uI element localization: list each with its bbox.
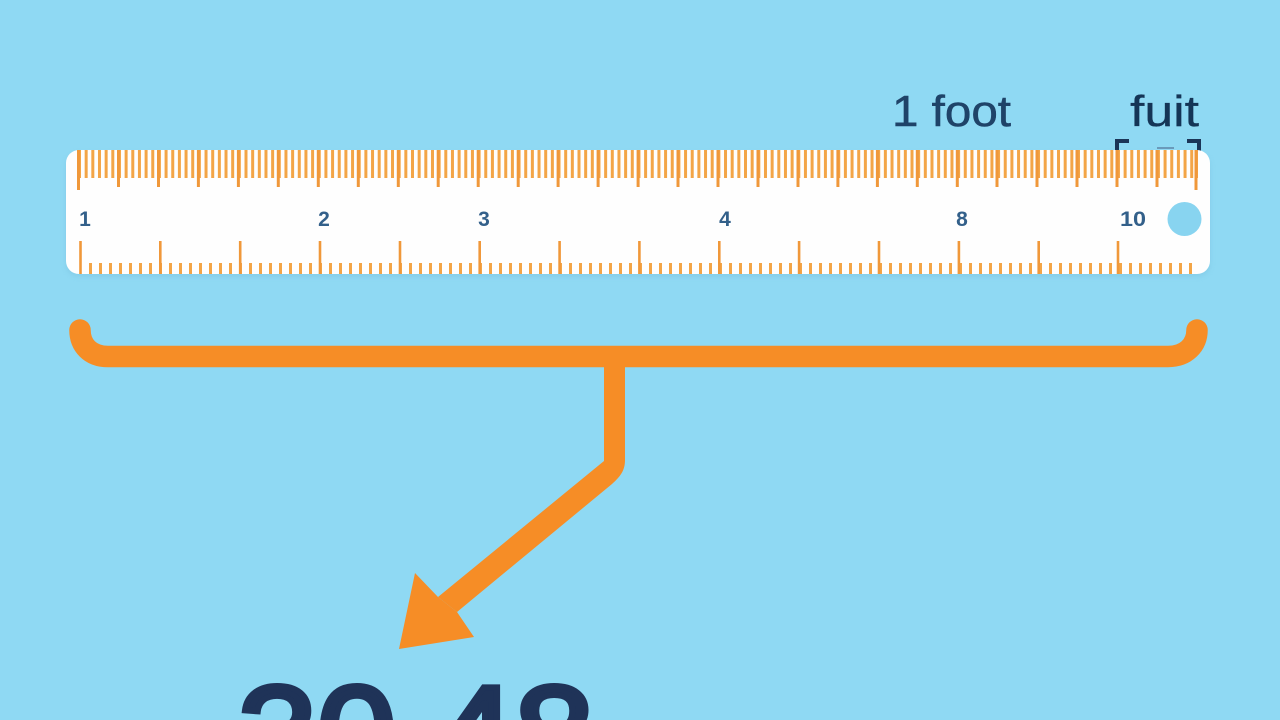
arrow — [399, 360, 625, 649]
bottom long ticks — [80, 241, 1118, 274]
ruler numbers: 4 — [719, 208, 731, 231]
brace under ruler — [80, 330, 1197, 356]
ruler numbers: 1 — [79, 208, 91, 231]
ruler numbers: 8 — [956, 208, 968, 231]
ruler numbers: 10 — [1120, 208, 1146, 231]
top long ticks — [78, 150, 1196, 190]
label: 1 foot: 1 foot — [892, 87, 1011, 136]
ruler numbers: 2 — [318, 208, 330, 231]
label: fuit: fuit — [1130, 87, 1199, 136]
ruler — [66, 150, 1210, 276]
icon: small bracket marks above ruler — [1117, 141, 1199, 152]
ruler numbers — [79, 208, 1146, 231]
ruler hanging hole — [1168, 202, 1202, 236]
bottom short ticks — [89, 263, 1194, 274]
arrow shaft — [438, 360, 625, 612]
top short ticks — [78, 150, 1198, 178]
arrow head — [399, 573, 474, 649]
ruler body — [66, 150, 1210, 274]
ruler numbers: 3 — [478, 208, 490, 231]
